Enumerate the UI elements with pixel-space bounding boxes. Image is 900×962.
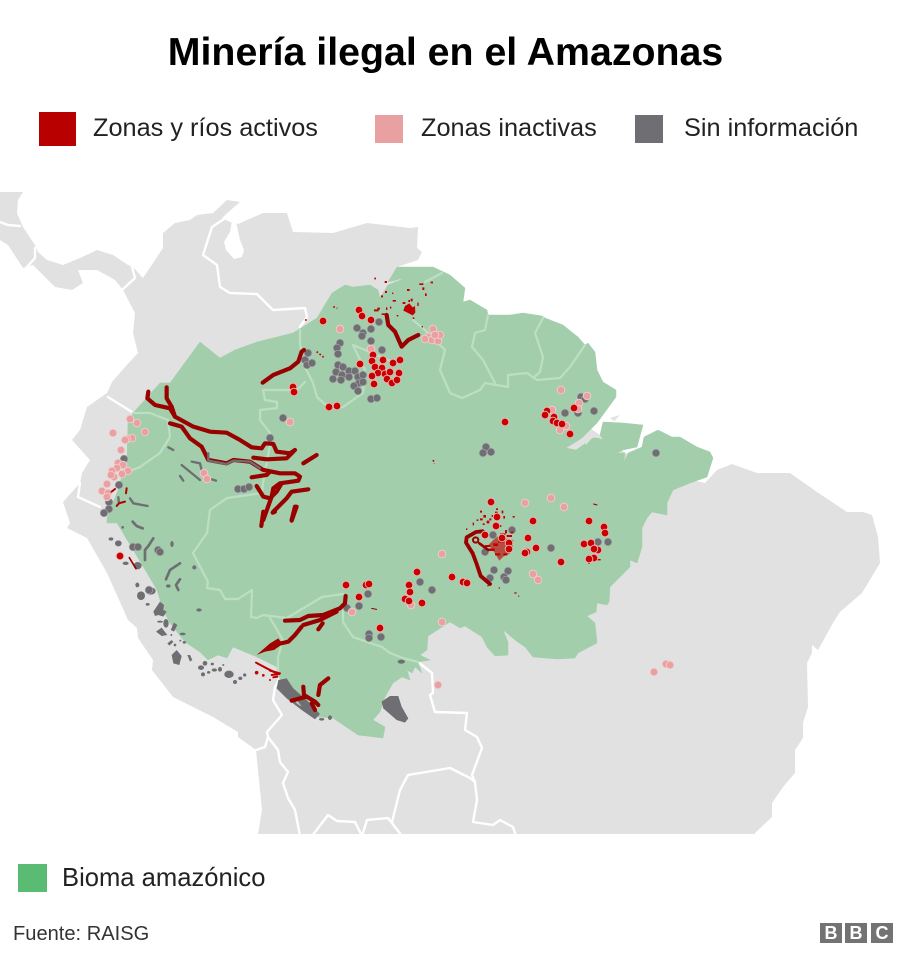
- legend: Amazon biome: Bioma amazónico: [62, 864, 265, 892]
- red rivers: south-west Amazon: [129, 507, 377, 710]
- BBC logo: B: [824, 923, 838, 943]
- scattered active mining patches, north: [374, 278, 433, 327]
- BBC logo: [820, 923, 893, 943]
- country borders inside the biome: [128, 273, 585, 673]
- red dots, south-east: [448, 498, 609, 587]
- source: Fuente: RAISG: [13, 923, 149, 945]
- lake Maracaibo: [224, 222, 244, 259]
- small red marks near the coast: [112, 488, 127, 506]
- BBC logo: B: [850, 923, 862, 943]
- BBC logo: C: [876, 923, 888, 943]
- south-east mining cluster and river: [466, 508, 515, 589]
- pink dots: inactive zones: [98, 325, 674, 689]
- red triangle patch: [257, 638, 283, 655]
- legend: active zones and rivers: [39, 112, 318, 146]
- legend: active zones and rivers: Zonas y ríos activos: [93, 114, 318, 142]
- gray zones with no information: west and south: [109, 447, 408, 723]
- white country borders: [0, 217, 516, 836]
- map of the Amazon basin: [0, 192, 880, 834]
- red dots, west and north: [289, 306, 578, 438]
- red dots, south-west: [116, 552, 426, 632]
- gray dots: [100, 318, 660, 642]
- legend: inactive zones: Zonas inactivas: [421, 114, 597, 142]
- Amazon biome in green: [107, 267, 713, 738]
- land: South America in gray: [0, 192, 880, 840]
- red rivers: north-west Amazon: [112, 307, 434, 520]
- scattered active mining patches, west: [305, 307, 434, 464]
- small red marks south-east: [514, 503, 601, 597]
- legend: no information: Sin información: [684, 114, 858, 142]
- title: Minería ilegal en el Amazonas: [168, 30, 723, 74]
- island in the Amazon mouth: [584, 415, 620, 445]
